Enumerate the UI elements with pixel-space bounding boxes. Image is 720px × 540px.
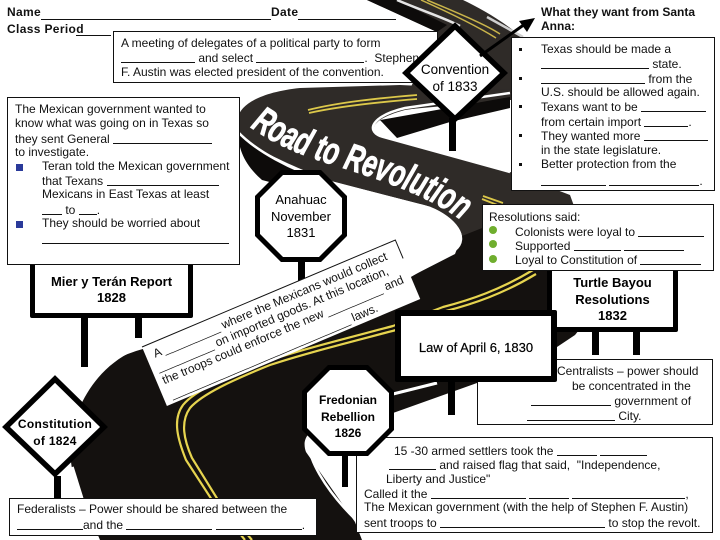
panel: resolutions said: Resolutions said: [489, 210, 580, 224]
sign: Mier y Terán Report: 1828 [97, 290, 126, 305]
header: name, date, class period: Date [271, 5, 298, 19]
panel: centralists: City. [618, 409, 641, 423]
panel: Fredonian details: and raised flag that said, "Independence, [439, 458, 660, 472]
header: name, date, class period [7, 5, 396, 36]
callout: rotated customs-house note: the troops could enforce the new _________ and [160, 273, 406, 387]
panel: Mexican government investigation: Teran told the Mexican government [42, 159, 229, 173]
panel: resolutions said: Supported [515, 239, 570, 253]
panel: Fredonian details [356, 437, 713, 533]
sign: Law of April 6, 1830: Law of April 6, 1830 [419, 340, 533, 355]
text: 1826 [335, 426, 361, 440]
list of demands: U.S. should be allowed again. [541, 85, 700, 99]
panel: Fredonian details: Liberty and Justice" [386, 472, 490, 486]
text: Rebellion [321, 410, 375, 424]
panel: what they want from Santa Anna [511, 5, 715, 191]
callout: rotated customs-house note: A _________ where the Mexicans would collect [151, 249, 390, 360]
panel: resolutions said: Loyal to Constitution of [515, 253, 637, 267]
panel: Mexican government investigation: they sent General [15, 132, 110, 146]
panel: Fredonian details: 15 -30 armed settlers took the [394, 444, 553, 458]
sign: Turtle Bayou Resolutions 1832: Resolutions [575, 292, 650, 306]
panel: resolutions said [482, 204, 714, 271]
panel: Mexican government investigation: to . [65, 203, 100, 217]
list of demands: state. [652, 57, 682, 71]
text: Constitution [18, 417, 92, 431]
panel: centralists [477, 359, 713, 425]
panel: federalists [9, 498, 317, 536]
panel: Mexican government investigation: that Texans [42, 174, 103, 188]
panel: Mexican government investigation: know what was going on in Texas so [15, 116, 209, 130]
text: of 1824 [33, 434, 77, 448]
heading: what they want [541, 5, 696, 33]
list of demands: . [699, 174, 703, 188]
panel: centralists: be concentrated in the [572, 379, 691, 393]
callout: rotated customs-house note: _____________________________ laws. [167, 301, 380, 401]
heading: what they want: What they want from Santa [541, 5, 695, 19]
panel: centralists: Centralists – power should [557, 364, 698, 378]
panel: convention definition: and select . Stephen [198, 51, 419, 65]
winding road illustration: Road to Revolution [250, 106, 471, 219]
list of demands: Texas should be made a [541, 42, 671, 56]
panel: Mexican government investigation [7, 97, 240, 265]
panel: resolutions said: Colonists were loyal to [515, 225, 635, 239]
text: 1831 [287, 225, 315, 240]
panel: Fredonian details: The Mexican government (with the help of Stephen F. Austin) [364, 500, 688, 514]
list of demands: Texans want to be [541, 100, 638, 114]
header: name, date, class period: Name [7, 5, 41, 19]
panel: federalists: Federalists – Power should be shared between the [17, 502, 287, 516]
sign: Turtle Bayou Resolutions 1832: Turtle Bayou [573, 275, 652, 290]
panel: Fredonian details: Called it the , [364, 487, 689, 501]
panel: Mexican government investigation: They should be worried about [42, 216, 200, 230]
text: November [271, 208, 331, 224]
panel: Mexican government investigation: to investigate. [15, 145, 89, 159]
list of demands: from the [648, 72, 692, 86]
list of demands: in the state legislature. [541, 143, 661, 157]
list of demands: They wanted more [541, 129, 640, 143]
panel: convention definition [113, 31, 438, 83]
list of demands: Better protection from the [541, 157, 676, 171]
list of demands [511, 37, 715, 191]
panel: Mexican government investigation: The Mexican government wanted to [15, 102, 206, 116]
text: Convention [421, 62, 489, 77]
panel: federalists: and the . [83, 518, 305, 532]
sign: Mier y Terán Report [30, 250, 193, 318]
heading: what they want: Anna: [541, 19, 575, 33]
header: name, date, class period: Class Period [7, 22, 84, 36]
sign: Turtle Bayou Resolutions 1832 [547, 240, 678, 332]
panel: Mexican government investigation: Mexicans in East Texas at least [42, 187, 209, 201]
panel: Fredonian details: sent troops to to stop the revolt. [364, 516, 700, 530]
text: Anahuac [275, 192, 327, 207]
panel: centralists: government of [614, 394, 691, 408]
sign: Mier y Terán Report: Mier y Terán Report [51, 274, 172, 289]
callout: rotated customs-house note: _________ on imported goods. At this location, [154, 264, 390, 375]
text: Fredonian [319, 393, 377, 407]
panel: convention definition: A meeting of delegates of a political party to form [121, 36, 380, 50]
sign: Turtle Bayou Resolutions 1832: 1832 [598, 308, 627, 323]
sign: Law of April 6, 1830 [395, 310, 557, 382]
text: of 1833 [432, 78, 478, 94]
panel: convention definition: F. Austin was elected president of the convention. [121, 65, 384, 79]
list of demands: from certain import . [541, 115, 692, 129]
